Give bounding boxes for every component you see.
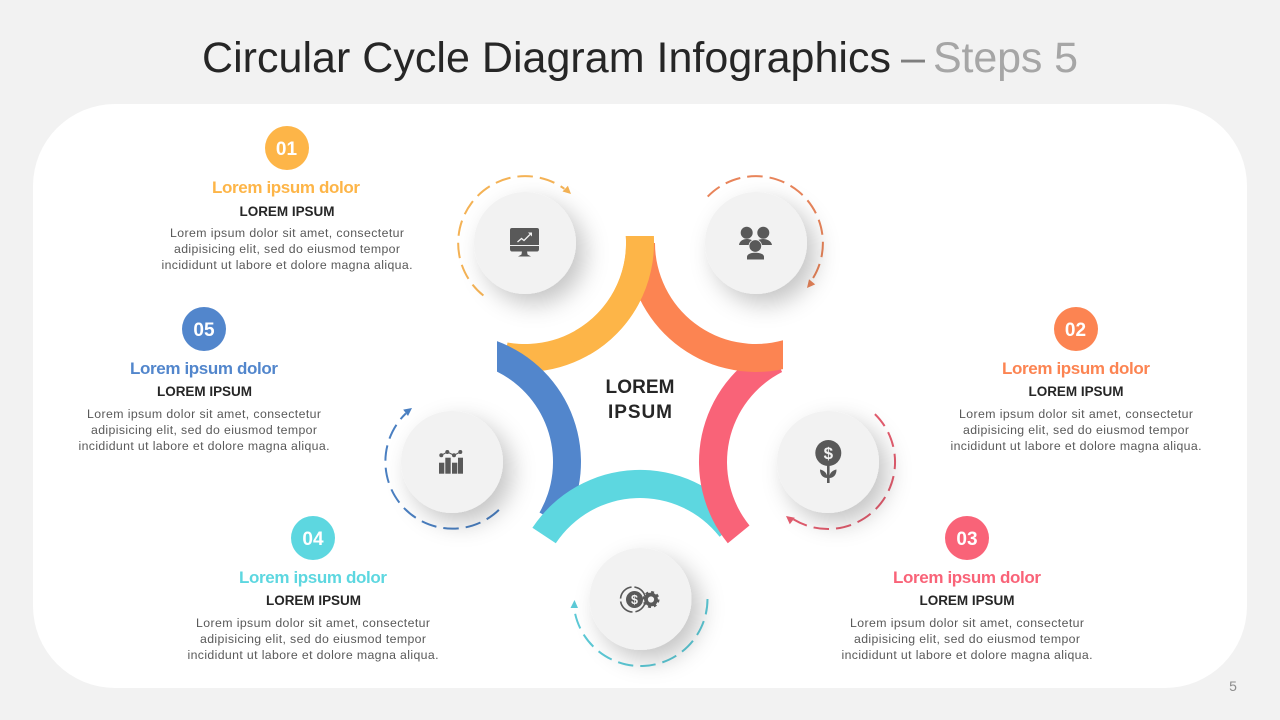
center label: LOREM: [606, 377, 674, 398]
subheading 04: LOREM IPSUM: [266, 593, 361, 608]
badge 05: [182, 307, 226, 351]
badge 02: 02: [1065, 320, 1086, 341]
body 01: Lorem ipsum dolor sit amet, consectetur: [170, 226, 404, 240]
badge 03: 03: [956, 529, 978, 550]
badge 05: 05: [193, 320, 215, 341]
body 05: Lorem ipsum dolor sit amet, consectetur: [87, 407, 321, 421]
body 04: Lorem ipsum dolor sit amet, consectetur: [196, 616, 430, 630]
badge 03: [945, 516, 989, 560]
icon: dollar plant: $: [824, 444, 834, 463]
dashed arrow: yellow: [458, 176, 571, 296]
heading 03: Lorem ipsum dolor: [893, 568, 1041, 587]
title: –: [901, 34, 925, 82]
heading 05: Lorem ipsum dolor: [130, 359, 278, 378]
body 02: Lorem ipsum dolor sit amet, consectetur: [959, 407, 1193, 421]
badge 02: [1054, 307, 1098, 351]
step 01: [162, 126, 412, 272]
body 03: Lorem ipsum dolor sit amet, consectetur: [850, 616, 1084, 630]
icon: monitor chart: [510, 228, 539, 256]
circle: dollar gear: [590, 548, 692, 650]
badge 01: [265, 126, 309, 170]
dashed arrow: pink: [786, 414, 895, 529]
icon: dollar plant: [815, 440, 841, 483]
arc: orange: [627, 243, 783, 372]
heading 02: Lorem ipsum dolor: [1002, 359, 1150, 378]
white panel: [33, 104, 1247, 688]
badge 04: [291, 516, 335, 560]
body 03: incididunt ut labore et dolore magna aliqua.: [842, 648, 1092, 662]
body 05: [78, 407, 330, 453]
dashed arrow: cyan: [570, 599, 708, 666]
heading 01: Lorem ipsum dolor: [212, 178, 360, 197]
center label: [606, 377, 674, 423]
heading 04: Lorem ipsum dolor: [239, 568, 387, 587]
arc: cyan: [532, 470, 742, 543]
subheading 03: LOREM IPSUM: [920, 593, 1014, 608]
body 03: adipisicing elit, sed do eiusmod tempor: [854, 632, 1080, 646]
body 04: adipisicing elit, sed do eiusmod tempor: [200, 632, 426, 646]
body 02: incididunt ut labore et dolore magna aliqua.: [950, 439, 1202, 453]
body 02: adipisicing elit, sed do eiusmod tempor: [963, 423, 1189, 437]
body 02: [950, 407, 1202, 453]
title: Circular Cycle Diagram Infographics: [202, 34, 891, 82]
arc: blue: [497, 341, 581, 526]
dashed arrow: orange: [708, 176, 823, 288]
center label: IPSUM: [608, 402, 672, 423]
icon: people: [739, 227, 772, 260]
body 01: incididunt ut labore et dolore magna aliqua.: [162, 258, 412, 272]
arc: yellow: [503, 236, 654, 372]
badge 04: 04: [302, 529, 324, 550]
step 03: [842, 516, 1092, 662]
badge 01: 01: [276, 139, 297, 160]
title: Steps 5: [933, 34, 1078, 82]
body 04: incididunt ut labore et dolore magna aliqua.: [188, 648, 438, 662]
page number: 5: [1229, 678, 1237, 694]
subheading 01: LOREM IPSUM: [240, 204, 334, 219]
icon: dollar gear: [620, 587, 658, 612]
arc: yellow top overlap: [576, 236, 654, 355]
subheading 05: LOREM IPSUM: [157, 384, 252, 399]
arc: pink: [699, 347, 782, 543]
step 02: [950, 307, 1202, 453]
circle: monitor: [474, 192, 576, 294]
body 04: [188, 616, 438, 662]
body 05: incididunt ut labore et dolore magna aliqua.: [78, 439, 330, 453]
circle: plant: [777, 411, 879, 513]
body 01: adipisicing elit, sed do eiusmod tempor: [174, 242, 400, 256]
body 05: adipisicing elit, sed do eiusmod tempor: [91, 423, 317, 437]
subheading 02: LOREM IPSUM: [1028, 384, 1124, 399]
circle: people: [705, 192, 807, 294]
icon: bar chart: [439, 450, 463, 474]
circle: bars: [401, 411, 503, 513]
step 05: [78, 307, 330, 453]
body 03: [842, 616, 1092, 662]
body 01: [162, 226, 412, 272]
icon: dollar gear: $: [631, 593, 638, 607]
cycle diagram ring: [497, 236, 783, 543]
step 04: [188, 516, 438, 662]
dashed arrow: blue: [385, 408, 499, 529]
